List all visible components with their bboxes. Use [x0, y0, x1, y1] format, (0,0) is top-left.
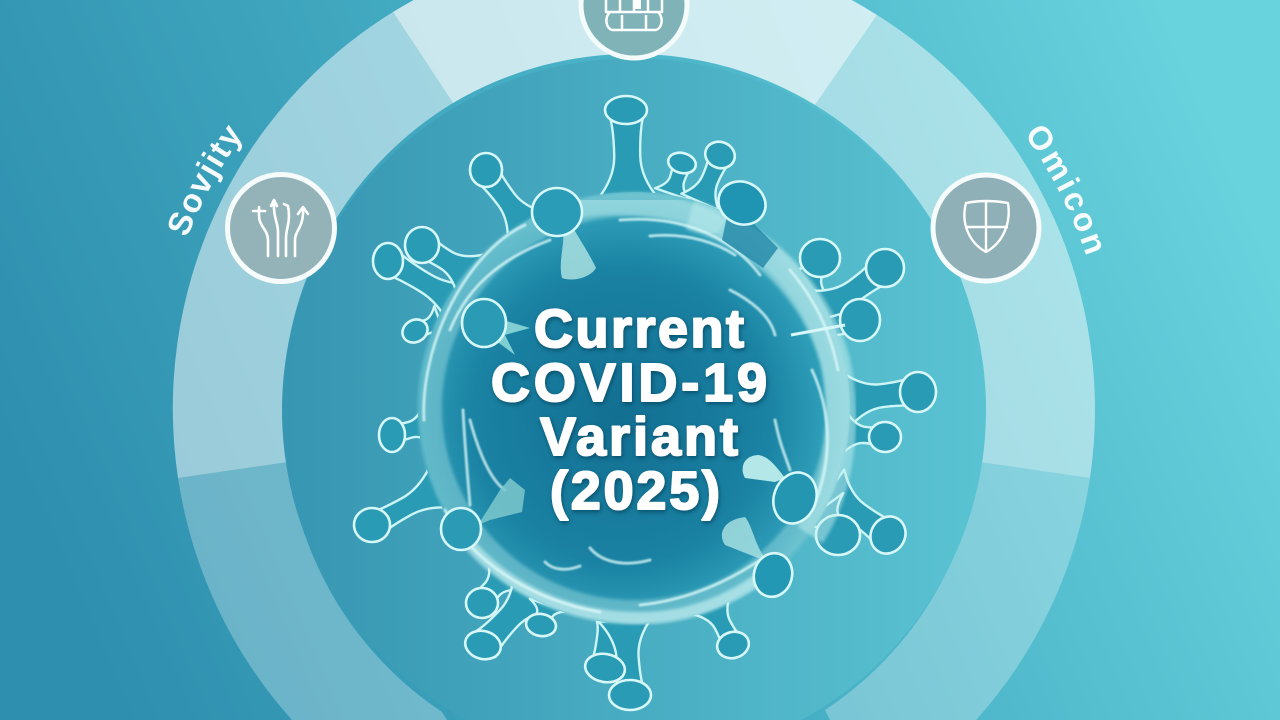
virus rim-mounted heads: [441, 174, 845, 601]
virus spike stalks: [362, 111, 921, 697]
title: Current: [534, 299, 744, 359]
segment: upper left: [173, 12, 453, 478]
title: (2025): [550, 461, 720, 521]
segment: lower right: [825, 462, 1090, 720]
title: Variant: [540, 407, 738, 467]
icon: right badge with shield: [933, 175, 1039, 281]
segment: lower left: [178, 462, 447, 720]
inner circle: [282, 58, 986, 720]
ring of segments: [173, 0, 1095, 720]
virus body: [418, 192, 850, 624]
icon: left badge with upward arrows: [228, 174, 334, 282]
title: [491, 299, 767, 521]
segment: upper right: [815, 15, 1095, 478]
virus spike heads: [354, 96, 936, 710]
title: COVID-19: [491, 353, 767, 413]
segment: top: [393, 0, 877, 105]
virus rim highlights: [424, 203, 841, 618]
label: Omicron, right curved: Omicon: [1028, 126, 1102, 254]
label: Severity, left curved: Sovjity: [168, 124, 242, 235]
virus illustration: [354, 96, 936, 710]
icon: top badge: [581, 0, 687, 58]
